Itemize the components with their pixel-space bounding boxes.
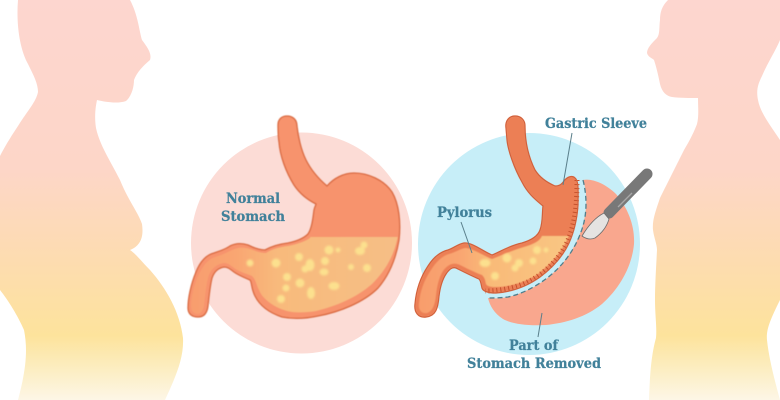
dashed cut line [488,180,586,298]
label: part of stomach removed: Stomach Removed [467,356,601,372]
label: part of stomach removed: Part of [509,338,559,354]
removed part of stomach [488,180,634,325]
leader line: part of stomach removed [538,313,542,337]
label: part of stomach removed [467,338,601,372]
stomach contents area [192,236,398,314]
icon: scalpel [582,174,647,239]
right silhouette: person after surgery [647,0,780,400]
illustration: normal stomach [188,116,400,318]
illustration: sleeve stomach [415,116,578,317]
label: gastric sleeve: Gastric Sleeve [545,116,647,132]
sleeve outline [415,116,578,317]
leader line: pylorus [461,222,472,253]
surgical stitches along sleeve edge [485,180,577,291]
panel: sleeve stomach circle [418,133,640,355]
food particles: sleeve stomach [480,246,548,280]
text: normal stomach label: Normal [226,191,280,207]
text: normal stomach label [221,191,285,225]
panel: normal stomach circle [191,132,412,354]
sleeve contents area [418,236,569,314]
left silhouette: person before surgery [0,0,183,400]
food particles: normal stomach [246,242,371,303]
text: normal stomach label: Stomach [221,209,285,225]
leader line: gastric sleeve [563,133,572,185]
label: pylorus: Pylorus [437,205,492,221]
